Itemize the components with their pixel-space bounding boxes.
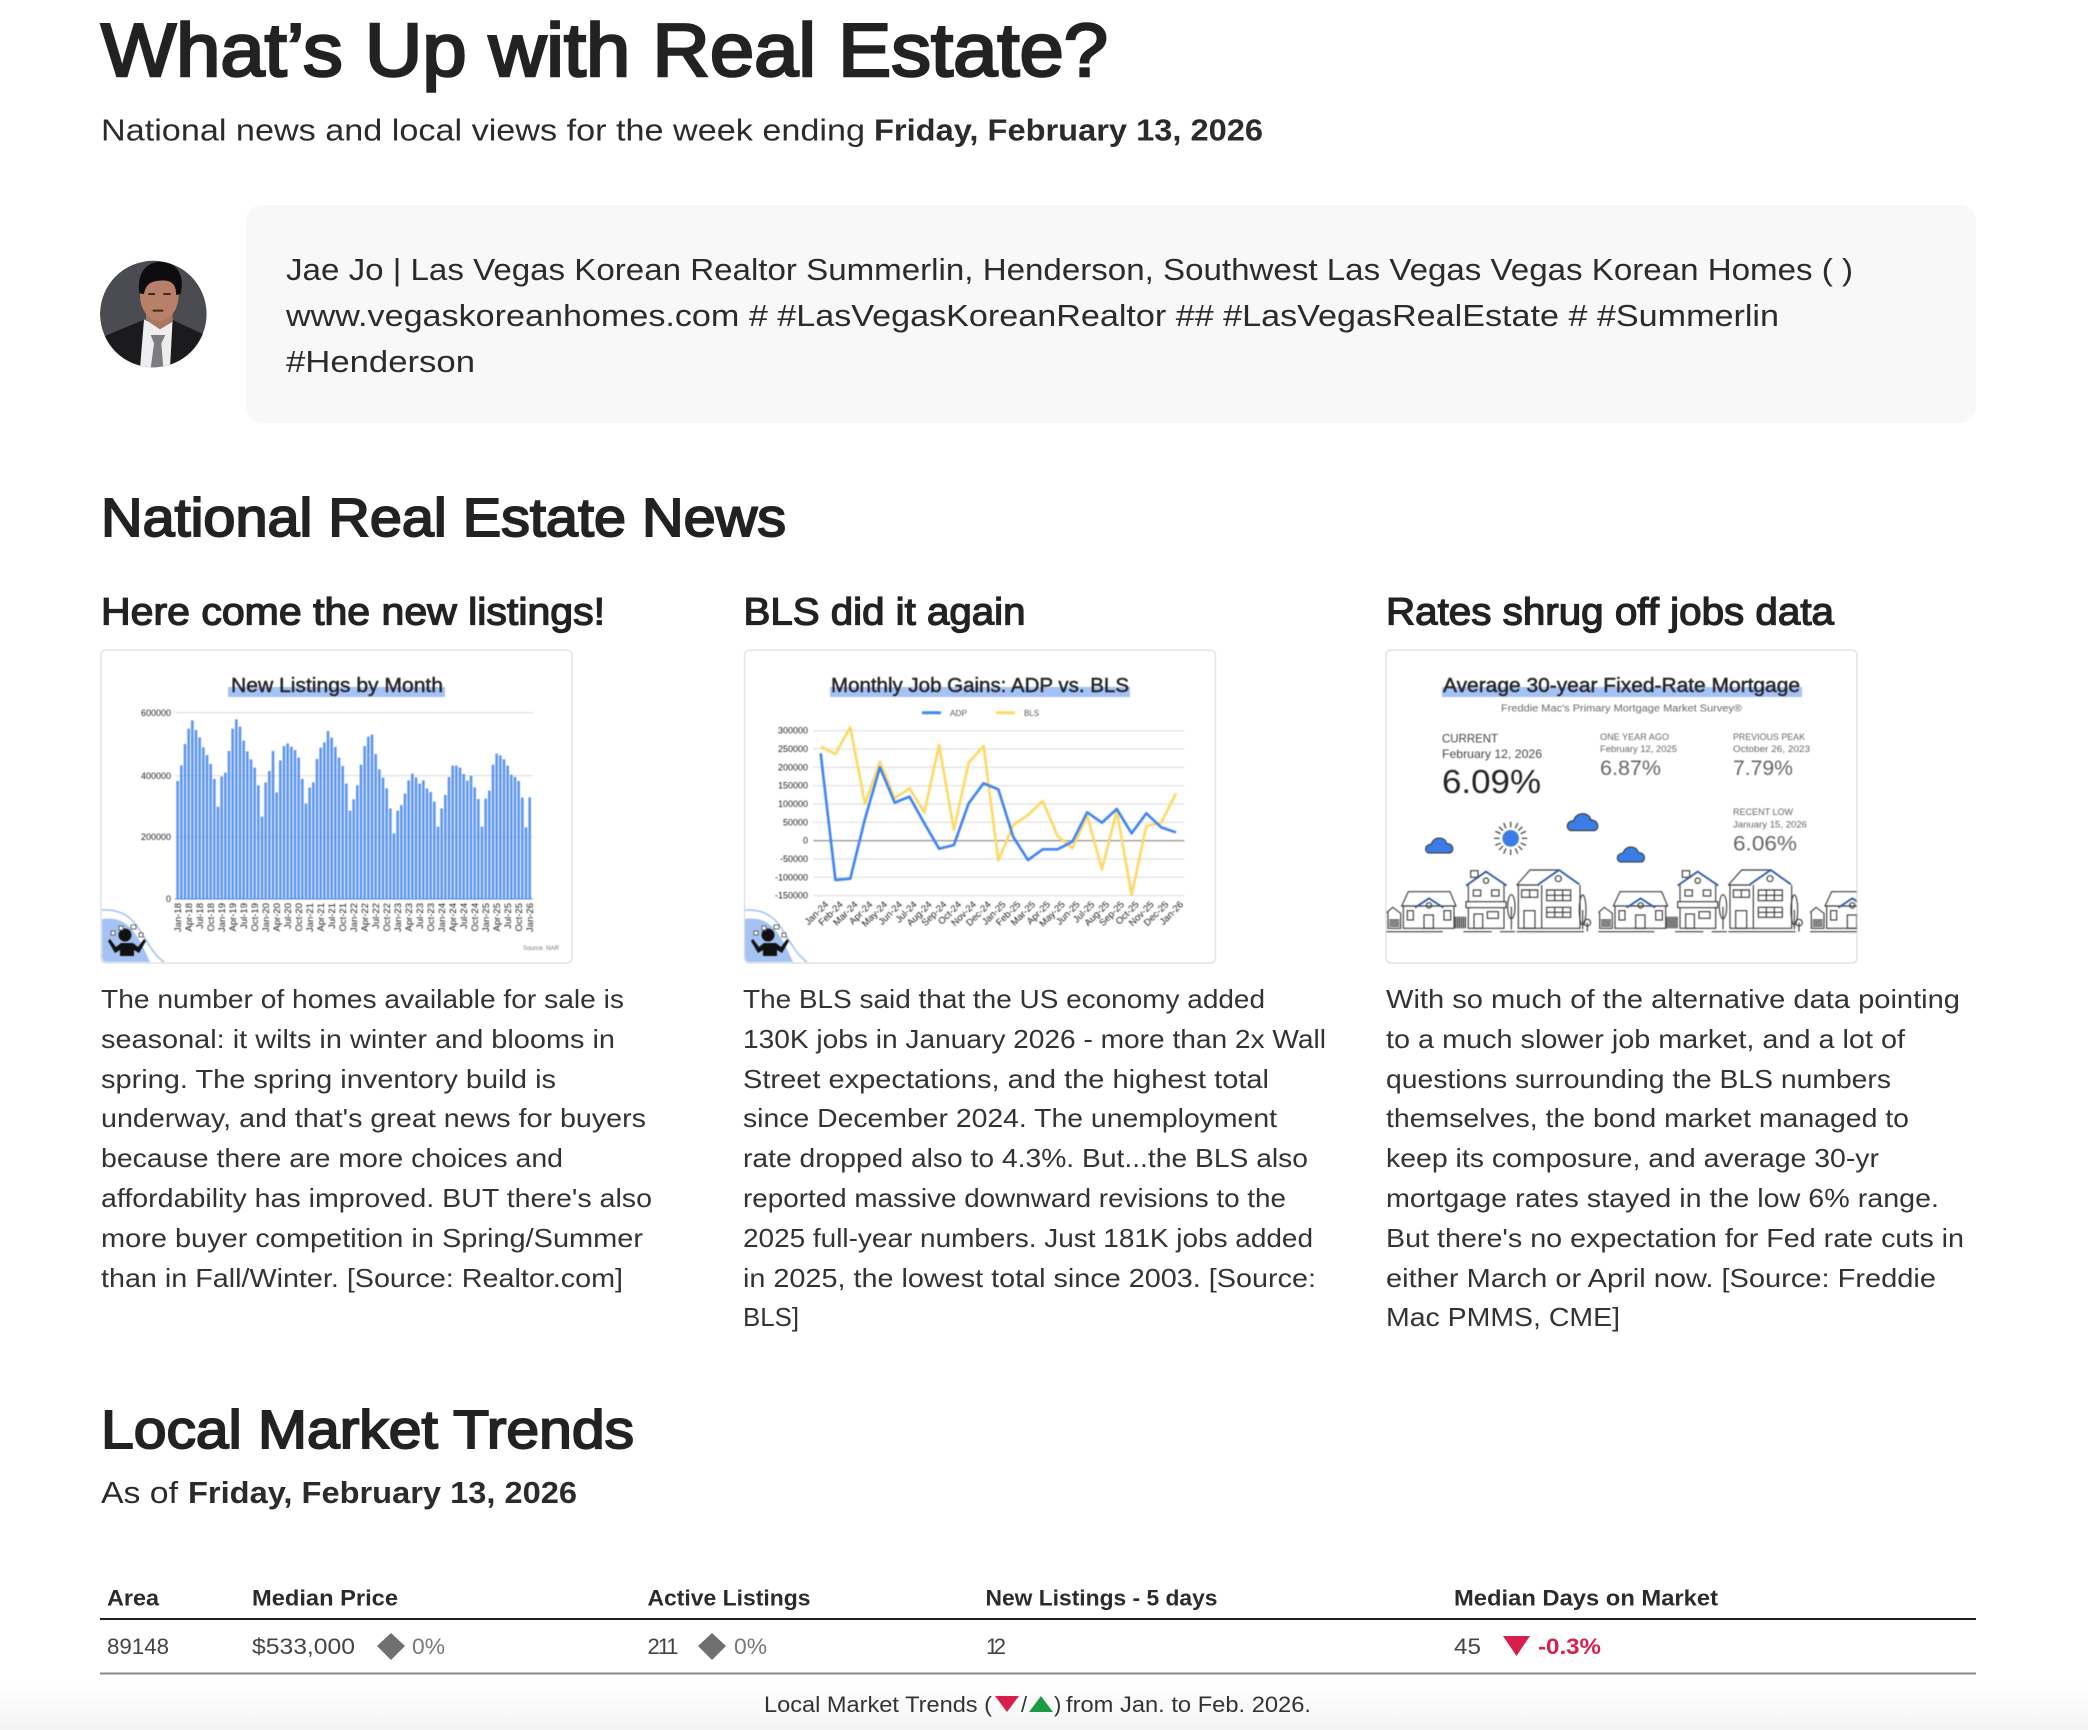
bar chart: new listings by month: Oct-22: [382, 903, 393, 932]
icon: agent portrait: [100, 261, 207, 370]
bar chart: new listings by month: Apr-23: [404, 903, 415, 932]
story text: in 2025, the lowest total since 2003. [Source:: [743, 1263, 1316, 1293]
story text: themselves, the bond market managed to: [1386, 1103, 1909, 1133]
bio card: [246, 205, 1976, 423]
graphic: average 30-year fixed-rate mortgage: January 15, 2026: [1733, 820, 1807, 830]
story text: BLS]: [743, 1302, 799, 1332]
bar chart: new listings by month: Jul-24: [459, 903, 470, 929]
table footnote: [764, 1692, 1311, 1717]
graphic: average 30-year fixed-rate mortgage: Average 30-year Fixed-Rate Mortgage: [1443, 675, 1800, 697]
line chart: monthly job gains: -150000: [775, 891, 808, 901]
table row: 89148: -0.3%: [1538, 1634, 1601, 1659]
bar chart: new listings by month: Jan-20: [261, 903, 272, 932]
as-of date: Friday, February 13, 2026: [188, 1475, 577, 1510]
story text: mortgage rates stayed in the low 6% range.: [1386, 1183, 1939, 1213]
line chart: monthly job gains: 100000: [778, 799, 808, 809]
story text: With so much of the alternative data pointing: [1386, 984, 1960, 1014]
line chart: monthly job gains: 250000: [778, 744, 808, 754]
bar chart: new listings by month: 600000: [141, 708, 171, 718]
line chart: monthly job gains: Jun-25: [1054, 899, 1082, 928]
story text: either March or April now. [Source: Freddie: [1386, 1263, 1936, 1293]
bio text: [285, 252, 1853, 379]
graphic: average 30-year fixed-rate mortgage: RECENT LOW: [1733, 807, 1794, 817]
line chart: monthly job gains: Mar-25: [1009, 899, 1038, 928]
bar chart: new listings by month: Jan-19: [217, 903, 228, 932]
table footnote: from Jan. to Feb. 2026.: [1066, 1692, 1311, 1717]
graphic: average 30-year fixed-rate mortgage: February 12, 2025: [1600, 744, 1677, 754]
graphic: average 30-year fixed-rate mortgage: 6.09%: [1442, 763, 1541, 800]
bar chart: new listings by month: Apr-21: [316, 903, 327, 932]
line chart: monthly job gains: Aug-24: [905, 899, 934, 929]
line chart: monthly job gains: Jul-24: [894, 899, 920, 925]
bar chart: new listings by month: Jan-22: [349, 903, 360, 932]
bar chart: new listings by month: Jan-26: [525, 903, 536, 932]
story text: The number of homes available for sale is: [101, 984, 624, 1014]
graphic: average 30-year fixed-rate mortgage: October 26, 2023: [1733, 744, 1810, 754]
story text: because there are more choices and: [101, 1143, 563, 1173]
line chart: monthly job gains: Oct-25: [1114, 899, 1142, 927]
line chart: monthly job gains: May-25: [1037, 899, 1068, 930]
bottom fade: [0, 1685, 2088, 1730]
story text: affordability has improved. BUT there's also: [101, 1183, 652, 1213]
bar chart: new listings by month: Source: NAR: [523, 946, 560, 952]
bar chart: new listings by month: Jul-23: [415, 903, 426, 929]
subtitle: Friday, February 13, 2026: [874, 112, 1263, 148]
title: What’s Up with Real Estate?: [101, 8, 1108, 92]
graphic: average 30-year fixed-rate mortgage: 7.79%: [1733, 757, 1793, 780]
graphic: average 30-year fixed-rate mortgage: 6.87%: [1600, 757, 1661, 780]
line chart: monthly job gains: Aug-25: [1083, 899, 1112, 929]
table header: Area: [107, 1586, 160, 1610]
table row: 89148: 0%: [412, 1634, 445, 1659]
story text: [1386, 984, 1964, 1332]
bar chart: new listings by month: Jul-25: [503, 903, 514, 929]
story text: [101, 984, 652, 1293]
table header: Median Days on Market: [1454, 1586, 1719, 1610]
table header: Active Listings: [648, 1586, 810, 1610]
table header: New Listings - 5 days: [986, 1586, 1218, 1610]
story text: questions surrounding the BLS numbers: [1386, 1064, 1891, 1094]
story text: [743, 984, 1326, 1332]
line chart: monthly job gains: -50000: [780, 854, 808, 864]
line chart: monthly job gains: 0: [803, 836, 808, 846]
bar chart: new listings by month: Oct-25: [514, 903, 525, 932]
heading: Local Market Trends: Local Market Trends: [101, 1400, 634, 1460]
story text: seasonal: it wilts in winter and blooms in: [101, 1024, 615, 1054]
graphic: average 30-year fixed-rate mortgage: ONE YEAR AGO: [1600, 732, 1669, 742]
bar chart: new listings by month: Oct-24: [470, 903, 481, 932]
table row: 89148: 89148: [107, 1634, 169, 1659]
line chart: monthly job gains: Oct-24: [936, 899, 964, 927]
table row: 89148: [107, 1633, 1601, 1660]
story text: rate dropped also to 4.3%. But...the BLS also: [743, 1143, 1308, 1173]
story text: than in Fall/Winter. [Source: Realtor.com]: [101, 1263, 623, 1293]
bar chart: new listings by month: Jan-21: [305, 903, 316, 932]
panel: agent profile: [100, 258, 1851, 372]
bar chart: new listings by month: Jul-18: [195, 903, 206, 929]
story text: spring. The spring inventory build is: [101, 1064, 556, 1094]
table footnote: ): [1054, 1692, 1061, 1717]
bar chart: new listings by month: Jan-18: [173, 903, 184, 932]
bar chart: new listings by month: 0: [166, 894, 171, 904]
bio text: #Henderson: [286, 344, 475, 379]
table row: 89148: 211: [648, 1634, 678, 1659]
table row: 89148: 0%: [734, 1634, 767, 1659]
line chart: monthly job gains: 50000: [783, 817, 808, 827]
line chart: monthly job gains: 150000: [778, 781, 808, 791]
line chart: monthly job gains: Apr-24: [847, 899, 875, 927]
line chart: monthly job gains: Nov-25: [1127, 899, 1156, 929]
story heading: Here come the new listings!: [101, 592, 605, 634]
line chart: monthly job gains: Dec-24: [964, 899, 994, 929]
line chart: monthly job gains: 200000: [778, 762, 808, 772]
bar chart: new listings by month: Oct-23: [426, 903, 437, 932]
line chart: monthly job gains: Jan-25: [980, 899, 1008, 928]
bio text: www.vegaskoreanhomes.com # #LasVegasKoreanRealtor ## #LasVegasRealEstate # #Summerlin: [285, 298, 1779, 333]
table footnote: /: [1021, 1692, 1028, 1717]
graphic: average 30-year fixed-rate mortgage: CURRENT: [1442, 732, 1499, 746]
table row: 89148: 45: [1454, 1634, 1481, 1659]
bar chart: new listings by month: 200000: [141, 832, 171, 842]
bar chart: new listings by month: Apr-22: [360, 903, 371, 932]
heading: National Real Estate News: National Real Estate News: [101, 488, 786, 548]
table footnote: Local Market Trends (: [764, 1692, 993, 1717]
line chart: monthly job gains: Nov-24: [949, 899, 979, 929]
bar chart: new listings by month: New Listings by Month: [231, 675, 443, 697]
line chart: monthly job gains: Jan-24: [803, 899, 831, 928]
story heading: BLS did it again: [744, 592, 1026, 634]
bar chart: new listings by month: Jul-20: [283, 903, 294, 929]
bar chart: new listings by month: Jul-19: [239, 903, 250, 929]
story text: underway, and that's great news for buyers: [101, 1103, 646, 1133]
line chart: monthly job gains: May-24: [860, 899, 890, 930]
story text: keep its composure, and average 30-yr: [1386, 1143, 1879, 1173]
graphic: average 30-year fixed-rate mortgage: [1385, 649, 1858, 964]
panel: BLS story: [743, 592, 1326, 1332]
story text: to a much slower job market, and a lot of: [1386, 1024, 1906, 1054]
panel: mortgage rates story: [1386, 592, 2014, 1332]
line chart: monthly job gains: Monthly Job Gains: ADP vs. BLS: [831, 675, 1129, 697]
bar chart: new listings by month: Jul-22: [371, 903, 382, 929]
bar chart: new listings by month: Oct-21: [338, 903, 349, 932]
bar chart: new listings by month: Apr-24: [448, 903, 459, 932]
bar chart: new listings by month: Oct-18: [206, 903, 217, 932]
line chart: monthly job gains: Jun-24: [876, 899, 905, 928]
bar chart: new listings by month: Apr-18: [184, 903, 195, 932]
table header: Median Price: [252, 1586, 398, 1610]
line chart: monthly job gains: Jan-26: [1158, 899, 1186, 928]
line chart: monthly job gains: -100000: [775, 872, 808, 882]
bar chart: new listings by month: 400000: [141, 771, 171, 781]
story text: more buyer competition in Spring/Summer: [101, 1223, 643, 1253]
graphic: average 30-year fixed-rate mortgage: Freddie Mac's Primary Mortgage Market Survey®: [1501, 704, 1743, 715]
line chart: monthly job gains: [744, 650, 1216, 963]
table row: 89148: $533,000: [252, 1634, 355, 1659]
bar chart: new listings by month: Jul-21: [327, 903, 338, 929]
table row: 89148: 12: [986, 1634, 1006, 1659]
subtitle: [101, 112, 1263, 148]
table: local market trends: [100, 1586, 1976, 1674]
bar chart: new listings by month: Jan-23: [393, 903, 404, 932]
bar chart: new listings by month: Apr-19: [228, 903, 239, 932]
line chart: monthly job gains: Feb-24: [817, 899, 846, 928]
graphic: average 30-year fixed-rate mortgage: PREVIOUS PEAK: [1733, 732, 1805, 742]
story text: Street expectations, and the highest total: [743, 1064, 1269, 1094]
table header: [107, 1586, 1719, 1610]
bar chart: new listings by month: Jan-24: [437, 903, 448, 932]
story text: Mac PMMS, CME]: [1386, 1302, 1620, 1332]
bar chart: new listings by month: Apr-20: [272, 903, 283, 932]
line chart: monthly job gains: Apr-25: [1025, 899, 1053, 927]
line chart: monthly job gains: 300000: [778, 726, 808, 736]
bar chart: new listings by month: Apr-25: [492, 903, 503, 932]
bar chart: new listings by month: Oct-20: [294, 903, 305, 932]
subtitle: National news and local views for the week ending: [101, 112, 865, 148]
graphic: average 30-year fixed-rate mortgage: February 12, 2026: [1442, 747, 1542, 761]
line chart: monthly job gains: BLS: [1024, 708, 1039, 718]
line chart: monthly job gains: Feb-25: [994, 899, 1023, 928]
story text: since December 2024. The unemployment: [743, 1103, 1278, 1133]
as-of date: As of: [101, 1475, 178, 1510]
line chart: monthly job gains: Mar-24: [831, 899, 860, 928]
line chart: monthly job gains: Sep-25: [1097, 899, 1127, 929]
bar chart: new listings by month: Oct-19: [250, 903, 261, 932]
line chart: monthly job gains: ADP: [950, 708, 967, 718]
story text: 130K jobs in January 2026 - more than 2x Wall: [743, 1024, 1326, 1054]
graphic: average 30-year fixed-rate mortgage: 6.06%: [1733, 833, 1797, 856]
panel: new listings story: [101, 592, 652, 1293]
story heading: Rates shrug off jobs data: [1386, 592, 1835, 634]
line chart: monthly job gains: Jul-25: [1071, 899, 1097, 925]
bar chart: new listings by month: [101, 650, 572, 963]
story text: 2025 full-year numbers. Just 181K jobs added: [743, 1223, 1313, 1253]
story text: reported massive downward revisions to the: [743, 1183, 1286, 1213]
story text: The BLS said that the US economy added: [743, 984, 1265, 1014]
bar chart: new listings by month: Jan-25: [481, 903, 492, 932]
story text: But there's no expectation for Fed rate cuts in: [1386, 1223, 1964, 1253]
line chart: monthly job gains: Sep-24: [920, 899, 949, 929]
line chart: monthly job gains: Dec-25: [1142, 899, 1171, 929]
bio text: Jae Jo | Las Vegas Korean Realtor Summerlin, Henderson, Southwest Las Vegas Vegas Korean Homes ( ): [286, 252, 1853, 287]
